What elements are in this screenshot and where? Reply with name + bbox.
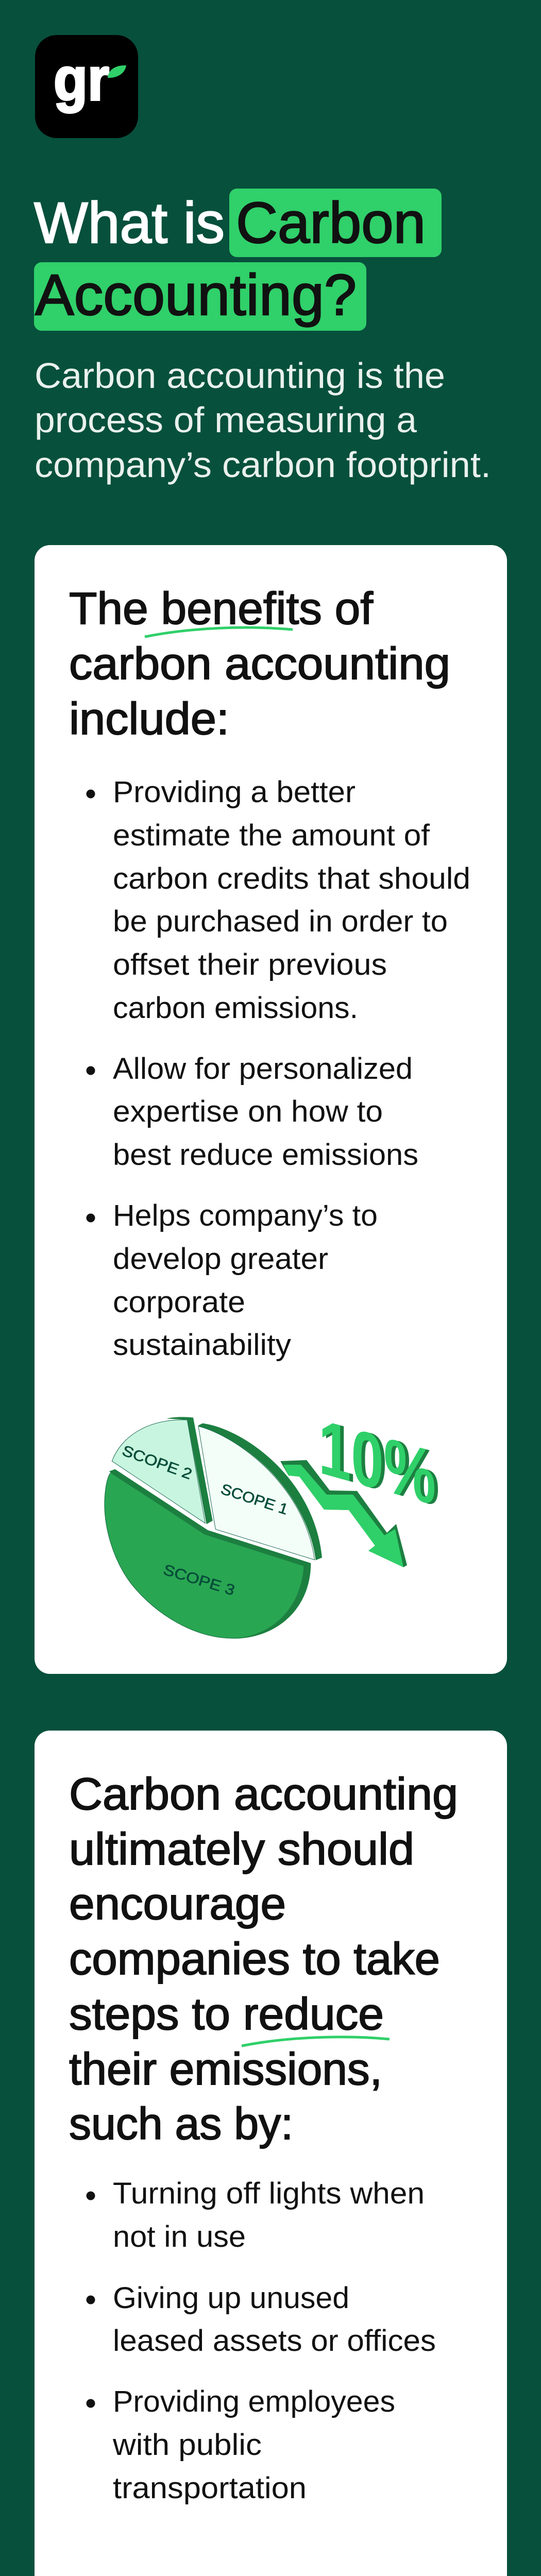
bullet list: benefits: expertise on how to: [113, 1095, 383, 1128]
heading: benefits: The benefits of: [69, 584, 374, 634]
bullet list: benefits: offset their previous: [113, 948, 387, 981]
bullet list: benefits: carbon credits that should: [113, 862, 470, 895]
heading: reduce: encourage: [69, 1879, 286, 1929]
subtitle text: Carbon accounting is the: [35, 355, 445, 396]
slice: scope 2: SCOPE 2: [120, 1443, 194, 1483]
heading: benefits: [69, 584, 450, 744]
heading: reduce: [69, 1769, 458, 2149]
bullet list: actions: with public: [112, 2428, 262, 2462]
title: Carbon: [236, 191, 426, 255]
bullet list: benefits: estimate the amount of: [113, 819, 430, 852]
bullet list: actions: not in use: [113, 2220, 246, 2253]
heading: reduce: Carbon accounting: [69, 1769, 458, 1819]
bullet list: benefits: sustainability: [113, 1328, 291, 1362]
bullet list: actions: transportation: [113, 2471, 307, 2505]
bullet list: benefits: corporate: [113, 1285, 245, 1319]
heading: reduce: companies to take: [69, 1934, 440, 1984]
heading: reduce: their emissions,: [69, 2044, 382, 2094]
title: [34, 189, 442, 331]
bullet list: benefits: Allow for personalized: [113, 1052, 413, 1086]
slice: scope 2: [112, 1417, 213, 1524]
label: 10 percent: 10%: [318, 1403, 436, 1522]
slice: scope 1: [198, 1423, 322, 1560]
bullet list: actions: Turning off lights when: [113, 2177, 425, 2210]
bullet list: actions: Providing employees: [113, 2385, 395, 2418]
bullet list: benefits: develop greater: [113, 1242, 328, 1276]
bullet list: benefits: be purchased in order to: [113, 905, 448, 938]
subtitle text: process of measuring a: [35, 400, 417, 440]
slice: scope 3: SCOPE 3: [161, 1562, 236, 1599]
logo: gr app icon: [35, 35, 138, 138]
slice: scope 3: [105, 1469, 311, 1639]
subtitle text: [35, 355, 491, 485]
panel: benefits: [35, 545, 507, 1674]
bullet list: actions: Giving up unused: [113, 2281, 349, 2315]
bullet list: actions: [87, 2177, 436, 2505]
label: 10 percent: 10%: [322, 1404, 439, 1523]
bullet list: benefits: best reduce emissions: [113, 1138, 418, 1172]
icon: declining arrow: [280, 1460, 407, 1567]
subtitle text: company’s carbon footprint.: [35, 445, 491, 485]
heading: benefits: include:: [69, 694, 229, 744]
bullet list: benefits: carbon emissions.: [113, 991, 358, 1025]
bullet list: benefits: Helps company’s to: [113, 1199, 378, 1232]
panel: reducing emissions: [35, 1731, 507, 2576]
title: Accounting?: [35, 263, 357, 327]
pie chart: scopes: [105, 1417, 322, 1639]
heading: reduce: ultimately should: [69, 1824, 414, 1874]
bullet list: benefits: Providing a better: [113, 775, 356, 809]
bullet list: actions: leased assets or offices: [113, 2324, 436, 2358]
heading: reduce: steps to reduce: [69, 1989, 384, 2039]
logo: gr app icon: gr: [54, 45, 109, 113]
bullet list: benefits: [87, 775, 470, 1362]
title: What is: [34, 191, 225, 255]
heading: reduce: such as by:: [69, 2099, 293, 2149]
slice: scope 1: SCOPE 1: [219, 1481, 290, 1518]
heading: benefits: carbon accounting: [69, 639, 450, 689]
